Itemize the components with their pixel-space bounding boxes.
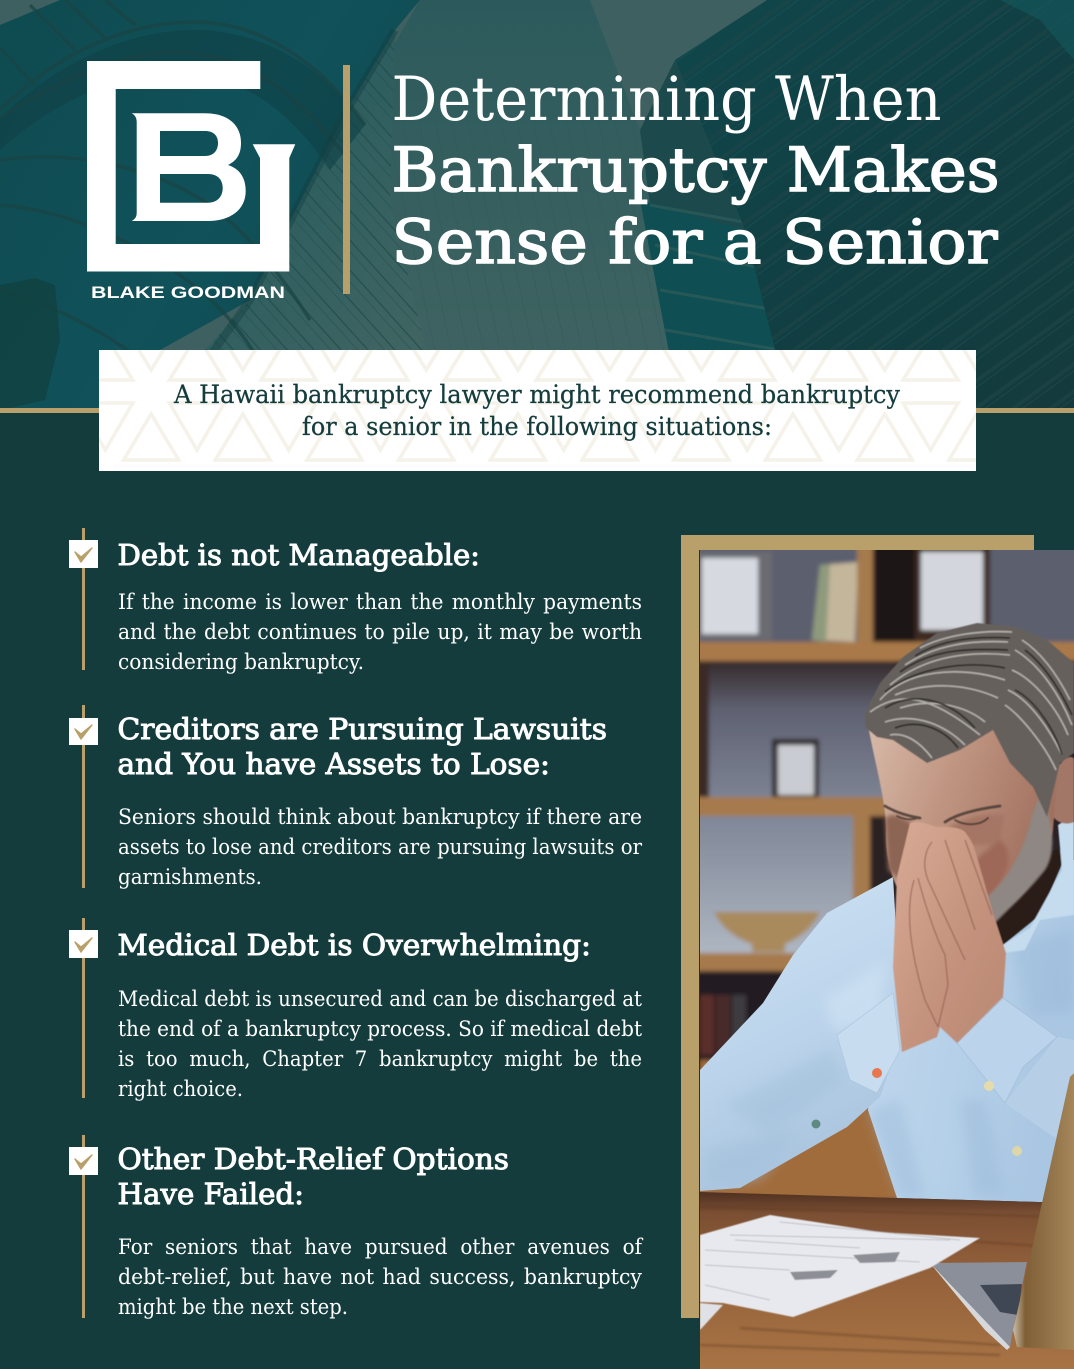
eyebrows and eyes bbox=[885, 806, 1000, 824]
beard bbox=[983, 795, 1052, 925]
body 1: If the income is lower than the monthly payments bbox=[118, 590, 642, 615]
bookshelf background bbox=[700, 550, 1074, 1198]
heading 3: Medical Debt is Overwhelming: bbox=[118, 928, 591, 962]
gold vertical divider bbox=[343, 65, 350, 294]
panel triangle pattern bbox=[99, 350, 976, 471]
intro panel bbox=[99, 350, 976, 471]
header background: skyscrapers photo bbox=[0, 0, 1074, 410]
body 2: assets to lose and creditors are pursuing lawsuits or bbox=[118, 835, 643, 860]
laptop base bbox=[930, 1262, 1027, 1347]
face bbox=[868, 730, 1055, 900]
timeline marker 3 bbox=[69, 918, 98, 1098]
papers on desk bbox=[700, 1215, 980, 1330]
desk bbox=[700, 1192, 1074, 1369]
timeline marker 2 bbox=[69, 705, 98, 888]
body 4: debt-relief, but have not had success, bankruptcy bbox=[118, 1265, 643, 1290]
left cuff bbox=[837, 993, 900, 1093]
timeline marker 4 bbox=[69, 1135, 98, 1318]
intro panel: for a senior in the following situations: bbox=[302, 412, 772, 441]
gold photo frame bbox=[681, 535, 1034, 1318]
body 3: is too much, Chapter 7 bankruptcy might be the bbox=[118, 1047, 642, 1072]
intro text: A Hawaii bankruptcy lawyer might recommend bankruptcy bbox=[173, 380, 901, 409]
heading 4: Other Debt-Relief Options bbox=[118, 1142, 509, 1176]
body 3: the end of a bankruptcy process. So if medical debt bbox=[118, 1017, 642, 1042]
body 4: might be the next step. bbox=[118, 1295, 348, 1320]
body 3: right choice. bbox=[118, 1077, 243, 1102]
heading 2 bbox=[118, 712, 607, 781]
shirt left sleeve bbox=[700, 877, 900, 1191]
body 3: Medical debt is unsecured and can be discharged at bbox=[118, 987, 642, 1012]
item 4: other debt relief failed bbox=[69, 1135, 644, 1320]
item 3: medical debt bbox=[69, 918, 642, 1102]
heading 4 bbox=[118, 1142, 509, 1211]
body 2: garnishments. bbox=[118, 865, 262, 890]
neck bbox=[996, 850, 1062, 945]
photo: worried senior man at desk bbox=[695, 545, 1074, 1369]
right sleeve and cuff bbox=[1009, 1037, 1074, 1138]
hair strands bbox=[870, 632, 1072, 770]
heading 2: and You have Assets to Lose: bbox=[118, 747, 550, 781]
logo: Blake Goodman bbox=[87, 61, 295, 302]
logo wordmark: BLAKE GOODMAN bbox=[91, 284, 285, 302]
body 1: considering bankruptcy. bbox=[118, 650, 364, 675]
body 4: For seniors that have pursued other avenues of bbox=[118, 1235, 644, 1260]
title: Bankruptcy Makes bbox=[392, 135, 1000, 206]
title: Determining When bbox=[392, 64, 942, 135]
timeline marker 1 bbox=[69, 528, 98, 670]
title: Sense for a Senior bbox=[392, 207, 998, 278]
hair bbox=[865, 623, 1074, 817]
item 1: debt is not manageable bbox=[69, 528, 642, 675]
gold band under header bbox=[0, 408, 1074, 413]
heading 2: Creditors are Pursuing Lawsuits bbox=[118, 712, 607, 746]
logo mark bbox=[87, 61, 295, 272]
praying hands bbox=[893, 822, 1006, 1052]
heading 1: Debt is not Manageable: bbox=[118, 538, 480, 572]
body 3 bbox=[118, 987, 642, 1102]
heading 4: Have Failed: bbox=[118, 1177, 304, 1211]
body 2: Seniors should think about bankruptcy if there are bbox=[118, 805, 642, 830]
title bbox=[392, 64, 1000, 278]
shirt buttons bbox=[812, 1068, 1022, 1156]
laptop lid bbox=[1013, 1073, 1074, 1350]
shirt torso bbox=[868, 860, 1074, 1203]
collar bbox=[1003, 815, 1074, 953]
item 2: creditors pursuing lawsuits bbox=[69, 705, 643, 890]
body 4 bbox=[118, 1235, 644, 1320]
ear bbox=[1052, 757, 1074, 824]
body 2 bbox=[118, 805, 643, 890]
body 1: and the debt continues to pile up, it may be worth bbox=[118, 620, 642, 645]
body 1 bbox=[118, 590, 642, 675]
